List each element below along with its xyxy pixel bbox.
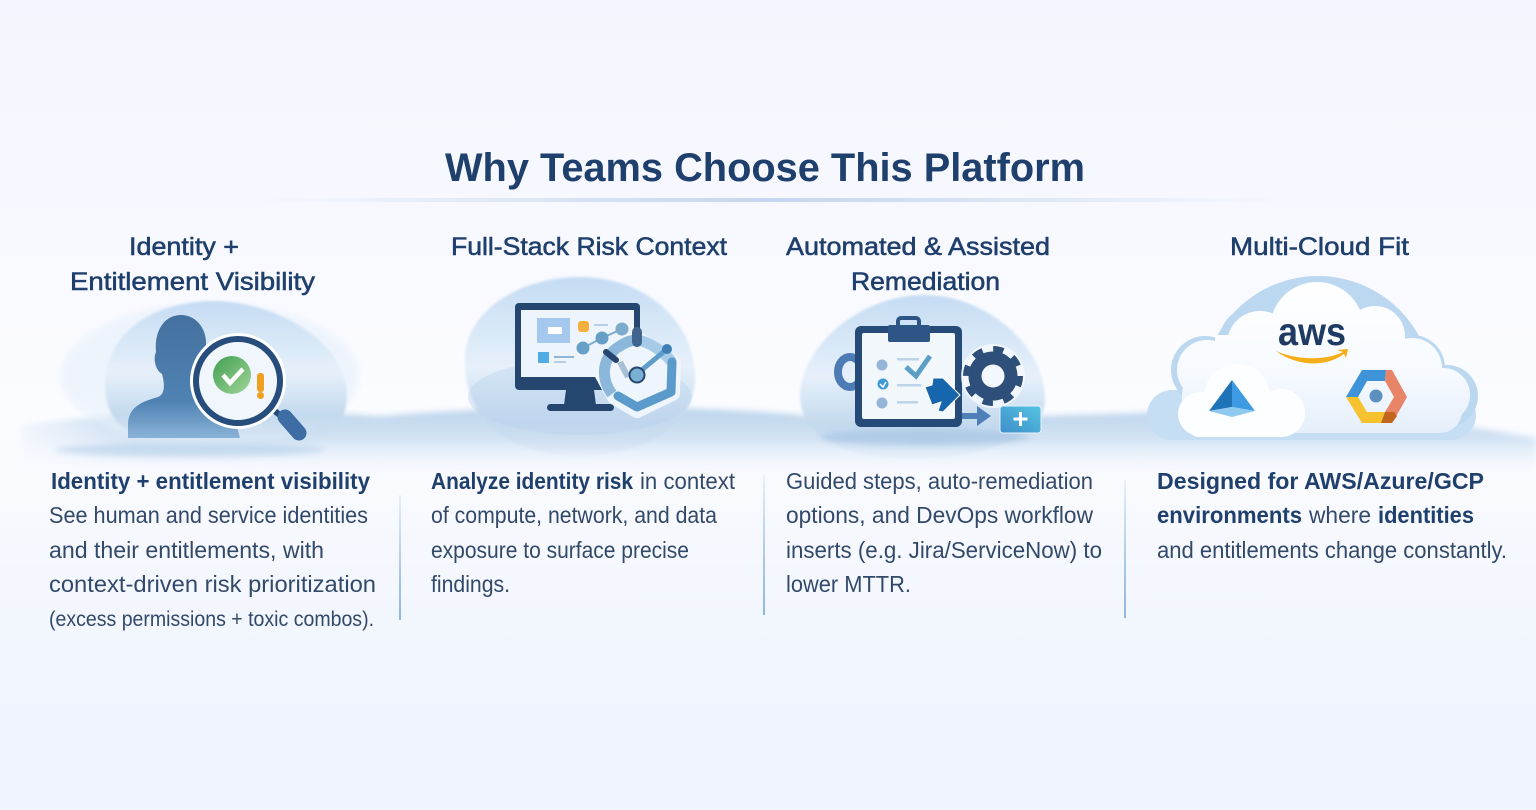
text: identity: [49, 468, 376, 631]
text: risk context: Analyze identity risk: [431, 468, 633, 494]
text: remediation: lower MTTR.: [786, 571, 911, 597]
text: remediation: [786, 468, 1102, 597]
front cloud: [1177, 282, 1470, 433]
gcp hexagon: [1346, 370, 1407, 423]
heading: identity: Entitlement Visibility: [70, 268, 316, 296]
text: risk context: exposure to surface precise: [431, 537, 689, 563]
magnifier: [196, 339, 299, 433]
text: remediation: options, and DevOps workflow: [786, 502, 1093, 528]
text: identity: and their entitlements, with: [49, 537, 324, 563]
text: identity: context-driven risk prioritization: [49, 571, 376, 597]
text: remediation: Guided steps, auto-remediation: [786, 468, 1093, 494]
text: multi-cloud: and entitlements change constantly.: [1157, 537, 1507, 563]
person silhouette: [128, 315, 240, 438]
text: risk context: in context: [640, 468, 736, 494]
divider: [399, 495, 401, 620]
icon: monitor and gauge: [465, 277, 695, 456]
icon: multi-cloud: [1147, 276, 1478, 440]
title underline: [250, 198, 1290, 202]
back cloud: [1147, 276, 1478, 440]
plus button: [1000, 406, 1041, 433]
heading: multi-cloud: Multi-Cloud Fit: [1230, 233, 1409, 261]
arrow: [962, 406, 991, 426]
monitor: [515, 303, 640, 411]
text: multi-cloud: where: [1308, 502, 1371, 528]
text: multi-cloud: environments: [1157, 502, 1302, 528]
icon: clipboard, gear and plus: [800, 295, 1045, 458]
icon: multi-cloud: aws: [1278, 311, 1346, 354]
heading: remediation: Remediation: [851, 268, 1000, 296]
heading: remediation: [786, 233, 1050, 296]
azure triangle: [1209, 380, 1255, 417]
title: Why Teams Choose This Platform: [445, 146, 1085, 190]
text: remediation: inserts (e.g. Jira/ServiceNow) to: [786, 537, 1102, 563]
text: identity: See human and service identities: [49, 502, 368, 528]
text: multi-cloud: [1157, 468, 1507, 563]
text: risk context: of compute, network, and data: [431, 502, 717, 528]
gear: [961, 344, 1025, 408]
text: identity: Identity + entitlement visibility: [51, 468, 370, 494]
text: risk context: [431, 468, 736, 597]
heading: identity: Identity +: [129, 233, 239, 261]
clipboard: [838, 318, 962, 427]
heading: remediation: Automated & Assisted: [786, 233, 1050, 261]
gauge: [602, 327, 673, 410]
divider: [1124, 480, 1126, 618]
text: multi-cloud: Designed for AWS/Azure/GCP: [1157, 468, 1484, 494]
divider: [763, 475, 765, 615]
icon: identity magnifier: [55, 301, 360, 457]
heading: full-stack: Full-Stack Risk Context: [451, 233, 727, 261]
aws smile: [1276, 349, 1348, 363]
front left cloud: [1178, 364, 1305, 437]
text: multi-cloud: identities: [1378, 502, 1474, 528]
text: identity: (excess permissions + toxic combos).: [49, 608, 374, 631]
heading: identity: [70, 233, 316, 296]
wave band: [24, 406, 1536, 462]
text: risk context: findings.: [431, 571, 510, 597]
